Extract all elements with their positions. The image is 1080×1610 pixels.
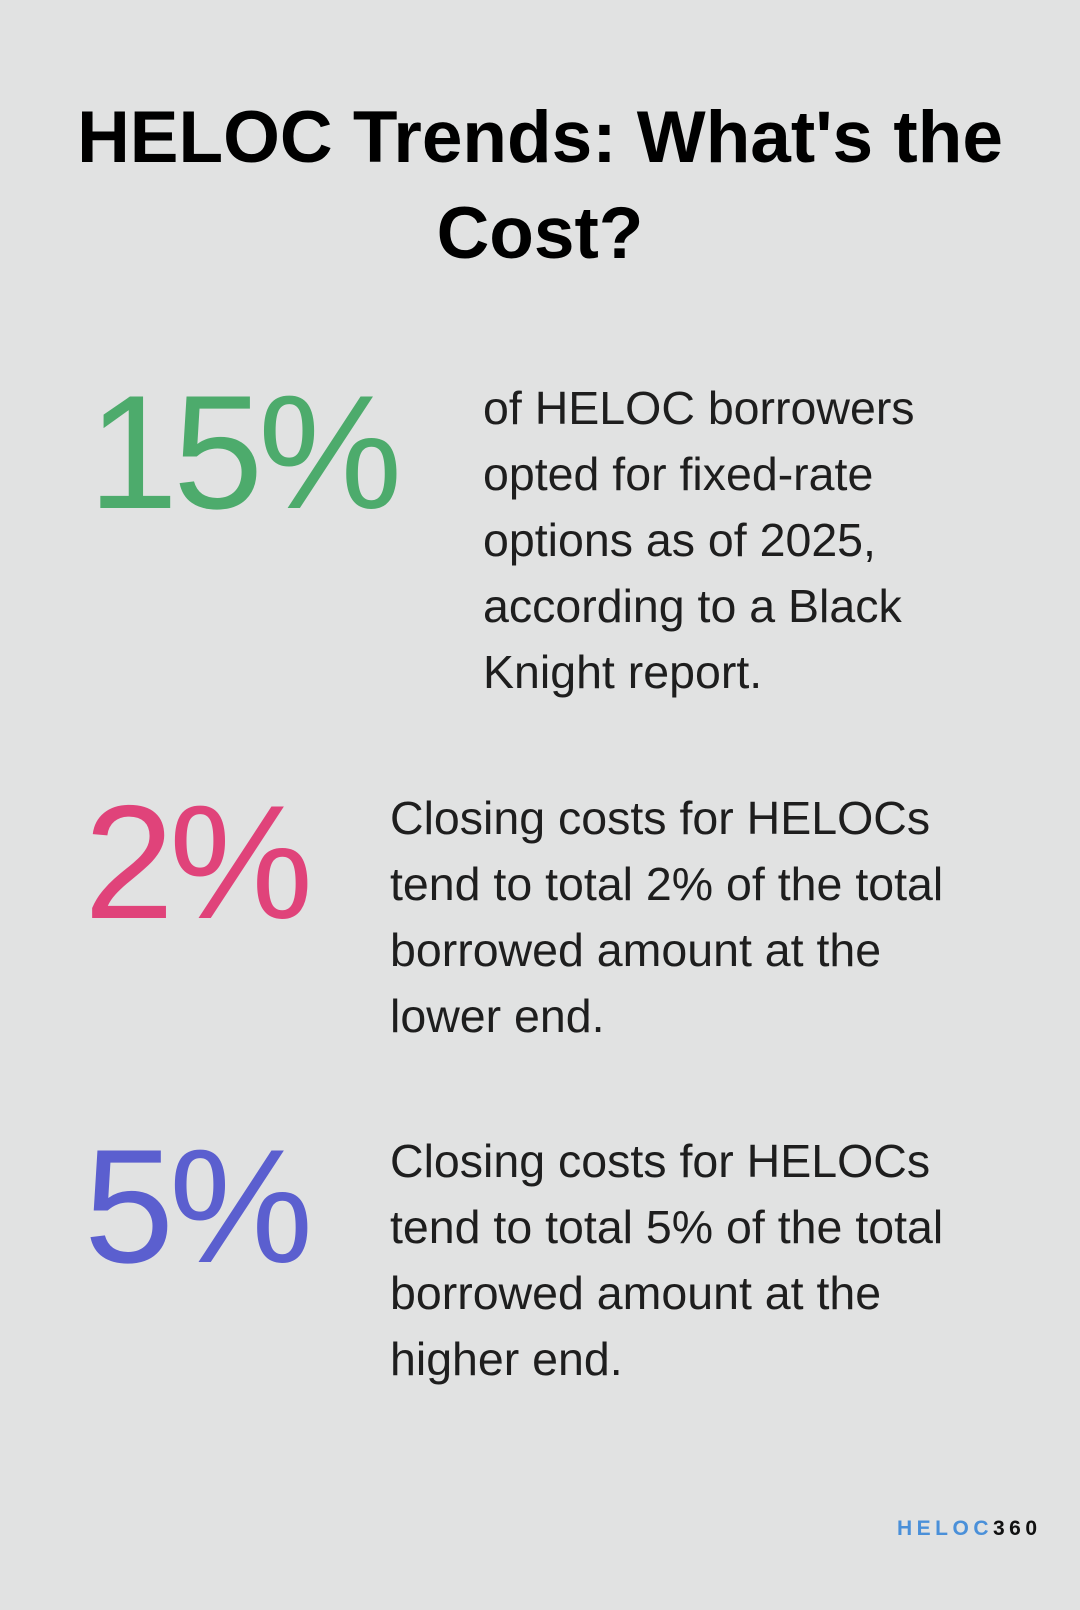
- stat: 2%: 2%: [84, 772, 308, 953]
- text: 15% description: according to a Black: [483, 580, 902, 632]
- stat: 15%: 15%: [88, 362, 397, 543]
- text: 5% description: borrowed amount at the: [390, 1267, 881, 1319]
- text: 2% description: lower end.: [390, 990, 605, 1042]
- text: 2% description: Closing costs for HELOCs: [390, 792, 930, 844]
- logo: HELOC360: [897, 1517, 1042, 1540]
- text: 2% description: borrowed amount at the: [390, 924, 881, 976]
- text: 5% description: higher end.: [390, 1333, 623, 1385]
- text: 5% description: Closing costs for HELOCs: [390, 1135, 930, 1187]
- title: HELOC Trends: What's the: [77, 97, 1003, 178]
- text: 2% description: tend to total 2% of the total: [390, 858, 943, 910]
- text: 5% description: tend to total 5% of the total: [390, 1201, 943, 1253]
- text: 15% description: of HELOC borrowers: [483, 382, 915, 434]
- text: 5% description: [390, 1135, 943, 1385]
- text: 15% description: opted for fixed-rate: [483, 448, 873, 500]
- text: 2% description: [390, 792, 943, 1042]
- text: 15% description: Knight report.: [483, 646, 762, 698]
- title: Cost?: [437, 193, 643, 274]
- text: 15% description: [483, 382, 915, 698]
- text: 15% description: options as of 2025,: [483, 514, 876, 566]
- title: [77, 97, 1003, 274]
- stat: 5%: 5%: [84, 1116, 308, 1297]
